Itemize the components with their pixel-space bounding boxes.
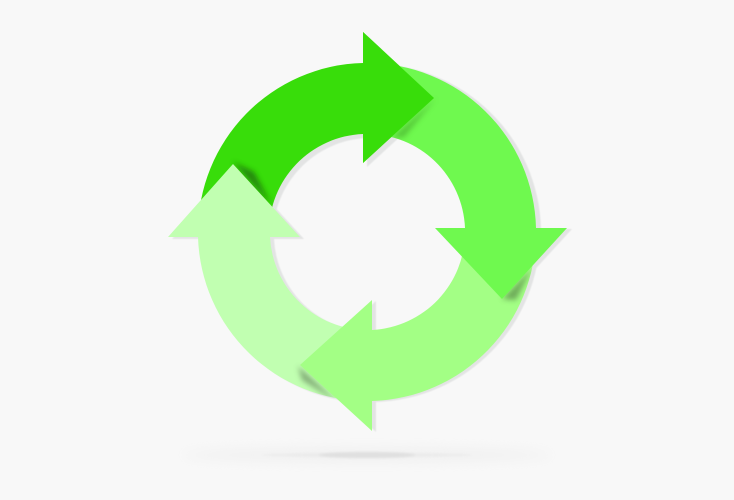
ground shadow xyxy=(182,448,552,462)
arrow 1: dark green, top-left arc xyxy=(198,32,434,232)
infographic: four-arrow cycle diagram xyxy=(168,32,572,459)
shadow of arrow 2 head on arrow 3 xyxy=(502,268,532,300)
arrow 4: palest green, bottom-left arc pointing up xyxy=(168,164,367,401)
cast shadow of the ring on the background xyxy=(172,36,572,432)
arrow 3: light green, bottom-right arc pointing left xyxy=(300,232,536,431)
shadow of arrow 4 head on arrow 1 xyxy=(233,162,272,206)
shadow of arrow 3 head on arrow 4 xyxy=(296,366,336,398)
shadow of arrow 1 head on arrow 2 xyxy=(392,103,432,140)
arrow 2: medium green, top-right arc pointing down xyxy=(367,63,567,299)
arrow 1 head: overlaps arrow 2 xyxy=(363,32,434,163)
